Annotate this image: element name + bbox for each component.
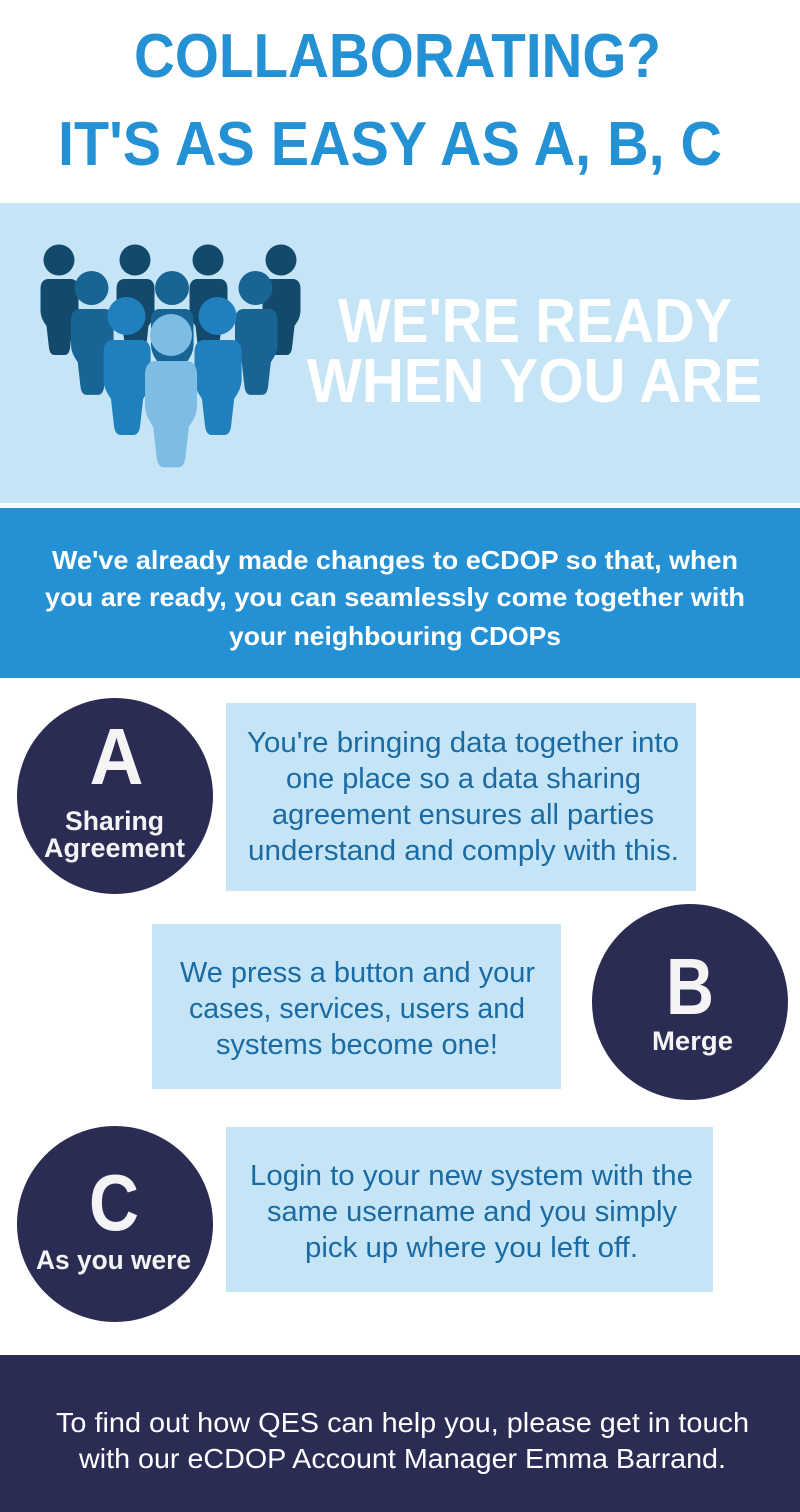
badge: B merge bbox=[592, 904, 788, 1100]
text: contact: with our eCDOP Account Manager Emma Barrand. bbox=[78, 1443, 726, 1474]
icon: group of people bbox=[40, 244, 300, 467]
step B bbox=[152, 904, 788, 1100]
badge: A sharing agreement bbox=[17, 698, 213, 894]
heading: we're ready when you are: WE'RE READY bbox=[338, 287, 732, 356]
badge: B merge: B bbox=[666, 942, 714, 1031]
badge: A sharing agreement: Agreement bbox=[44, 833, 185, 863]
panel: ready when you are bbox=[0, 203, 800, 503]
text box: B: systems become one! bbox=[216, 1029, 498, 1061]
step C bbox=[17, 1126, 713, 1322]
title: COLLABORATING? bbox=[134, 22, 661, 91]
text: intro: you are ready, you can seamlessly come together with bbox=[45, 582, 745, 612]
heading: we're ready when you are: WHEN YOU ARE bbox=[307, 347, 762, 416]
title bbox=[58, 22, 722, 179]
text box: C: pick up where you left off. bbox=[305, 1232, 638, 1264]
badge: A sharing agreement: Sharing bbox=[65, 806, 164, 836]
panel: intro banner bbox=[0, 508, 800, 678]
text: contact bbox=[56, 1407, 749, 1474]
badge: C as you were bbox=[17, 1126, 213, 1322]
text: intro: We've already made changes to eCDOP so that, when bbox=[52, 545, 738, 575]
text box: B: We press a button and your bbox=[180, 957, 536, 989]
text box: C bbox=[226, 1127, 713, 1292]
text box: B: cases, services, users and bbox=[189, 993, 525, 1025]
text: contact: To find out how QES can help you, please get in touch bbox=[56, 1407, 749, 1438]
step A bbox=[17, 698, 696, 894]
heading: we're ready when you are bbox=[307, 287, 762, 416]
text: intro: your neighbouring CDOPs bbox=[229, 621, 561, 651]
badge: C as you were: C bbox=[89, 1158, 139, 1247]
text: intro bbox=[45, 545, 745, 651]
badge: C as you were: As you were bbox=[36, 1245, 191, 1275]
panel: footer contact bbox=[0, 1355, 800, 1512]
badge: B merge: Merge bbox=[652, 1026, 733, 1056]
text box: A bbox=[226, 703, 696, 891]
text box: A: one place so a data sharing bbox=[286, 763, 641, 795]
text box: B bbox=[152, 924, 561, 1089]
text box: A: You're bringing data together into bbox=[247, 727, 679, 759]
title: IT'S AS EASY AS A, B, C bbox=[58, 110, 722, 179]
text box: A: understand and comply with this. bbox=[248, 835, 679, 867]
text box: C: Login to your new system with the bbox=[250, 1160, 693, 1192]
text box: A: agreement ensures all parties bbox=[272, 799, 654, 831]
text box: C: same username and you simply bbox=[267, 1196, 678, 1228]
badge: A sharing agreement: A bbox=[90, 712, 144, 801]
